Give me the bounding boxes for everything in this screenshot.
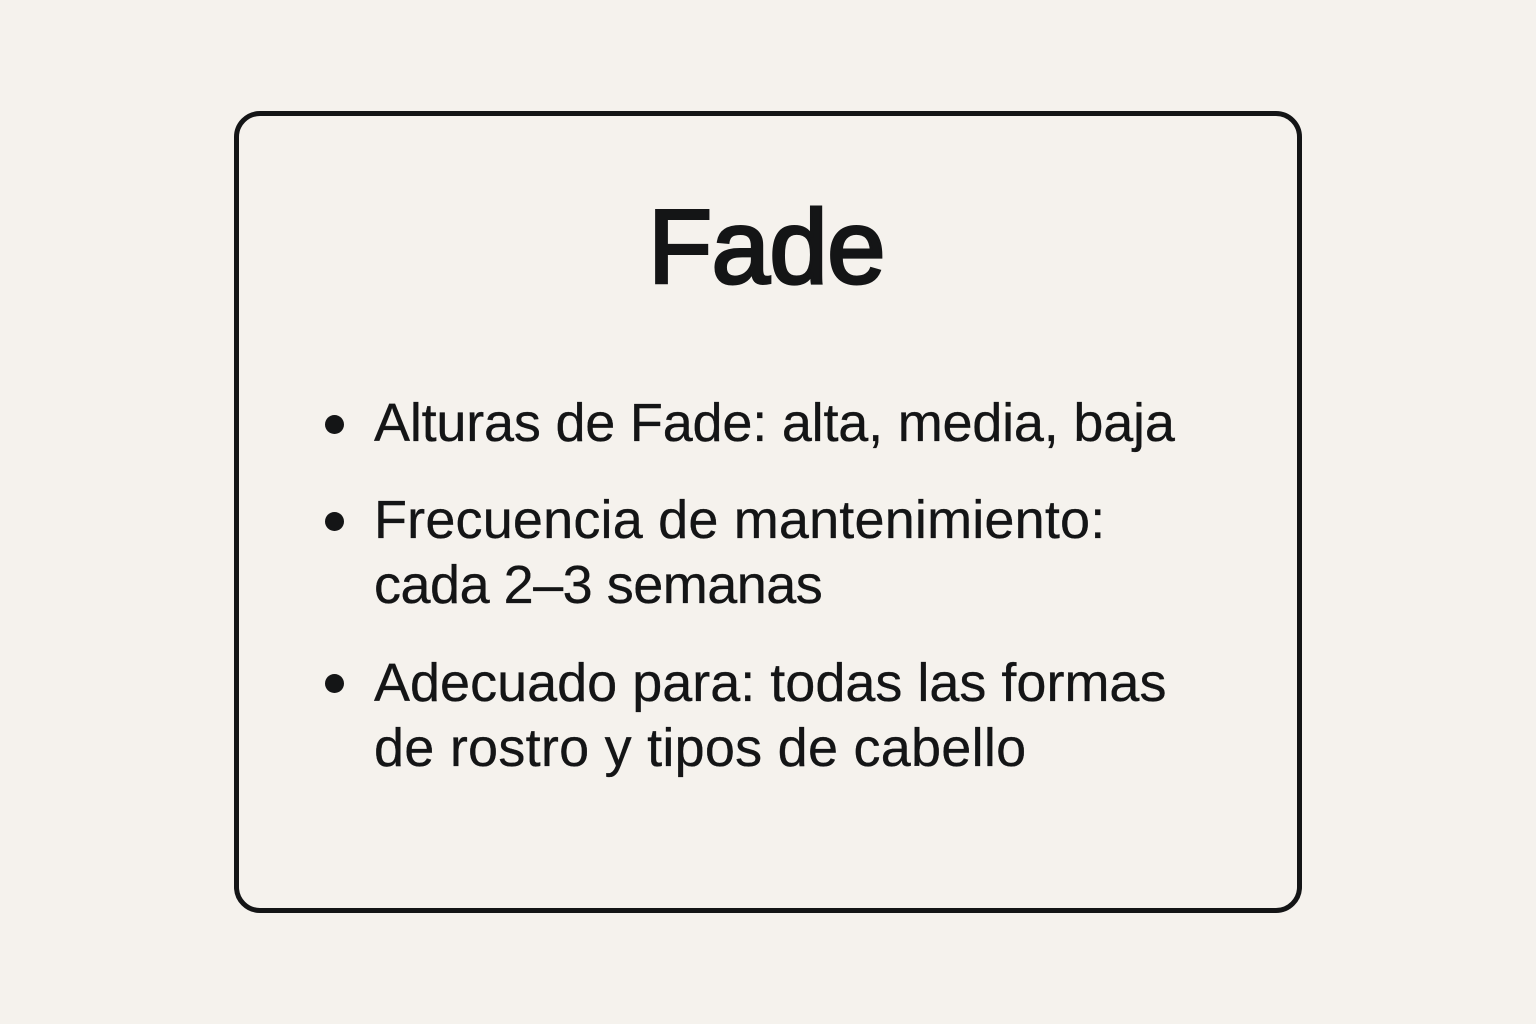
- bullet dot 2: [325, 512, 344, 531]
- bullet text: adecuado: [374, 653, 1166, 778]
- bullet text: frecuencia: [374, 490, 1105, 615]
- panel: Fade card: [234, 111, 1302, 913]
- bullet text: frecuencia: cada 2–3 semanas: [374, 555, 822, 615]
- title: Fade: [648, 189, 885, 306]
- bullet text: alturas: Alturas de Fade: alta, media, baja: [374, 393, 1175, 453]
- bullet dot 1: [325, 415, 344, 434]
- bullet text: adecuado: Adecuado para: todas las formas: [374, 653, 1166, 713]
- bullet dot 3: [325, 674, 344, 693]
- bullet text: frecuencia: Frecuencia de mantenimiento:: [374, 490, 1105, 550]
- bullet text: adecuado: de rostro y tipos de cabello: [374, 718, 1026, 778]
